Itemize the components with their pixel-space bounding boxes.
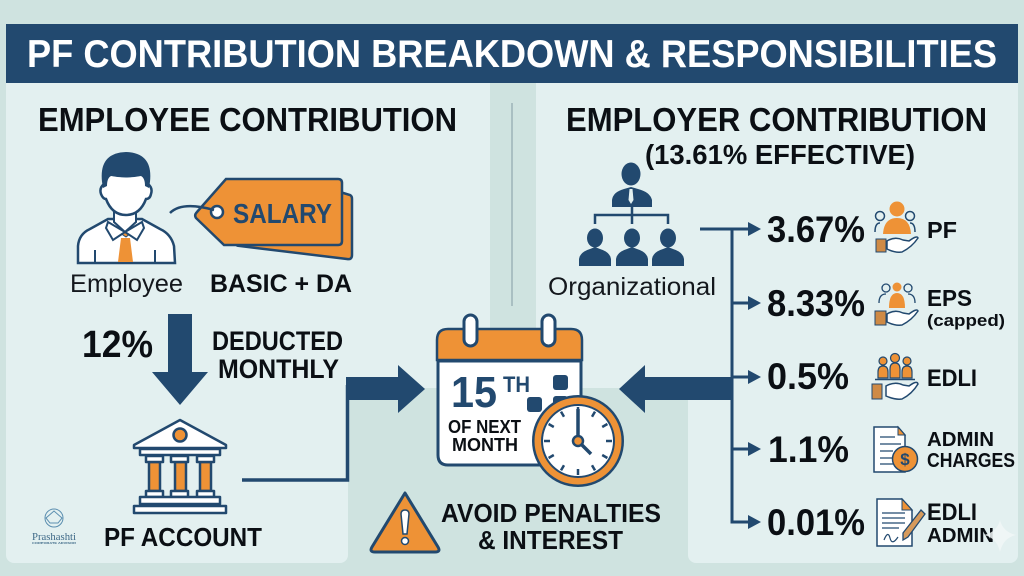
row: edli admin 0.01%: 0.01% — [767, 502, 865, 543]
row: admin charges 1.1%: ADMIN — [927, 429, 994, 451]
label: deducted monthly: DEDUCTED — [212, 326, 343, 356]
callout: avoid penalties: AVOID PENALTIES — [441, 498, 661, 528]
icon: warning triangle — [371, 493, 439, 552]
callout: avoid penalties: & INTEREST — [478, 525, 623, 555]
row: EDLI 0.5% — [767, 354, 977, 399]
label: 12%: 12% — [82, 324, 153, 366]
row: admin charges 1.1%: $ — [900, 450, 910, 469]
icon: organizational chart — [579, 162, 684, 266]
row: EPS 8.33%: (capped) — [927, 311, 1005, 330]
heading: employee contribution: EMPLOYEE CONTRIBUTION — [38, 101, 457, 138]
arrow: pf account to due date — [242, 365, 425, 480]
row: PF 3.67%: PF — [927, 217, 957, 243]
label: basic + da: BASIC + DA — [210, 270, 352, 298]
icon: salary tag: SALARY — [233, 198, 332, 229]
heading: employer contribution: (13.61% EFFECTIVE) — [645, 139, 915, 170]
row: PF 3.67% — [767, 202, 957, 252]
icon: calendar due date: OF NEXT — [448, 417, 521, 437]
row: edli admin 0.01% — [767, 499, 994, 547]
icon: calendar due date: MONTH — [452, 435, 518, 455]
row: edli admin 0.01%: EDLI — [927, 499, 977, 526]
heading: employer contribution: EMPLOYER CONTRIBUTION — [566, 101, 987, 138]
icon: salary tag — [170, 179, 352, 259]
panel: employee — [6, 83, 490, 563]
row: admin charges 1.1%: 1.1% — [768, 429, 849, 470]
label: deducted monthly: MONTHLY — [218, 354, 339, 384]
icon: employee — [78, 152, 175, 263]
row: EDLI 0.5%: 0.5% — [767, 356, 849, 397]
logo: prashashti: CORPORATE ADVISOR — [32, 541, 77, 545]
icon: clock — [532, 395, 624, 487]
callout: avoid penalties — [441, 498, 661, 555]
row: EDLI 0.5%: EDLI — [927, 365, 977, 392]
logo: prashashti — [32, 509, 77, 545]
arrow: employer to due date — [619, 365, 733, 413]
icon: calendar due date — [437, 315, 582, 465]
label: deducted monthly — [212, 326, 343, 384]
row: EPS 8.33% — [767, 282, 1005, 330]
heading: employer contribution — [566, 101, 987, 170]
row: edli admin 0.01%: ADMIN — [927, 525, 994, 547]
icon: calendar due date: TH — [503, 372, 530, 397]
logo: prashashti: Prashashti — [32, 532, 76, 543]
icon: bank — [134, 420, 226, 513]
arrow: deduction down — [152, 314, 208, 405]
row: EPS 8.33%: EPS — [927, 285, 972, 311]
connector: employer breakdown tree — [700, 222, 761, 529]
row: EPS 8.33%: 8.33% — [767, 283, 865, 324]
row: PF 3.67%: 3.67% — [767, 209, 865, 250]
label: employee: Employee — [70, 270, 183, 298]
label: organizational: Organizational — [548, 273, 716, 301]
icon: calendar due date: 15 — [451, 368, 497, 417]
row: admin charges 1.1% — [768, 427, 1015, 472]
panel: employer — [536, 83, 1018, 563]
label: pf account: PF ACCOUNT — [104, 522, 262, 552]
